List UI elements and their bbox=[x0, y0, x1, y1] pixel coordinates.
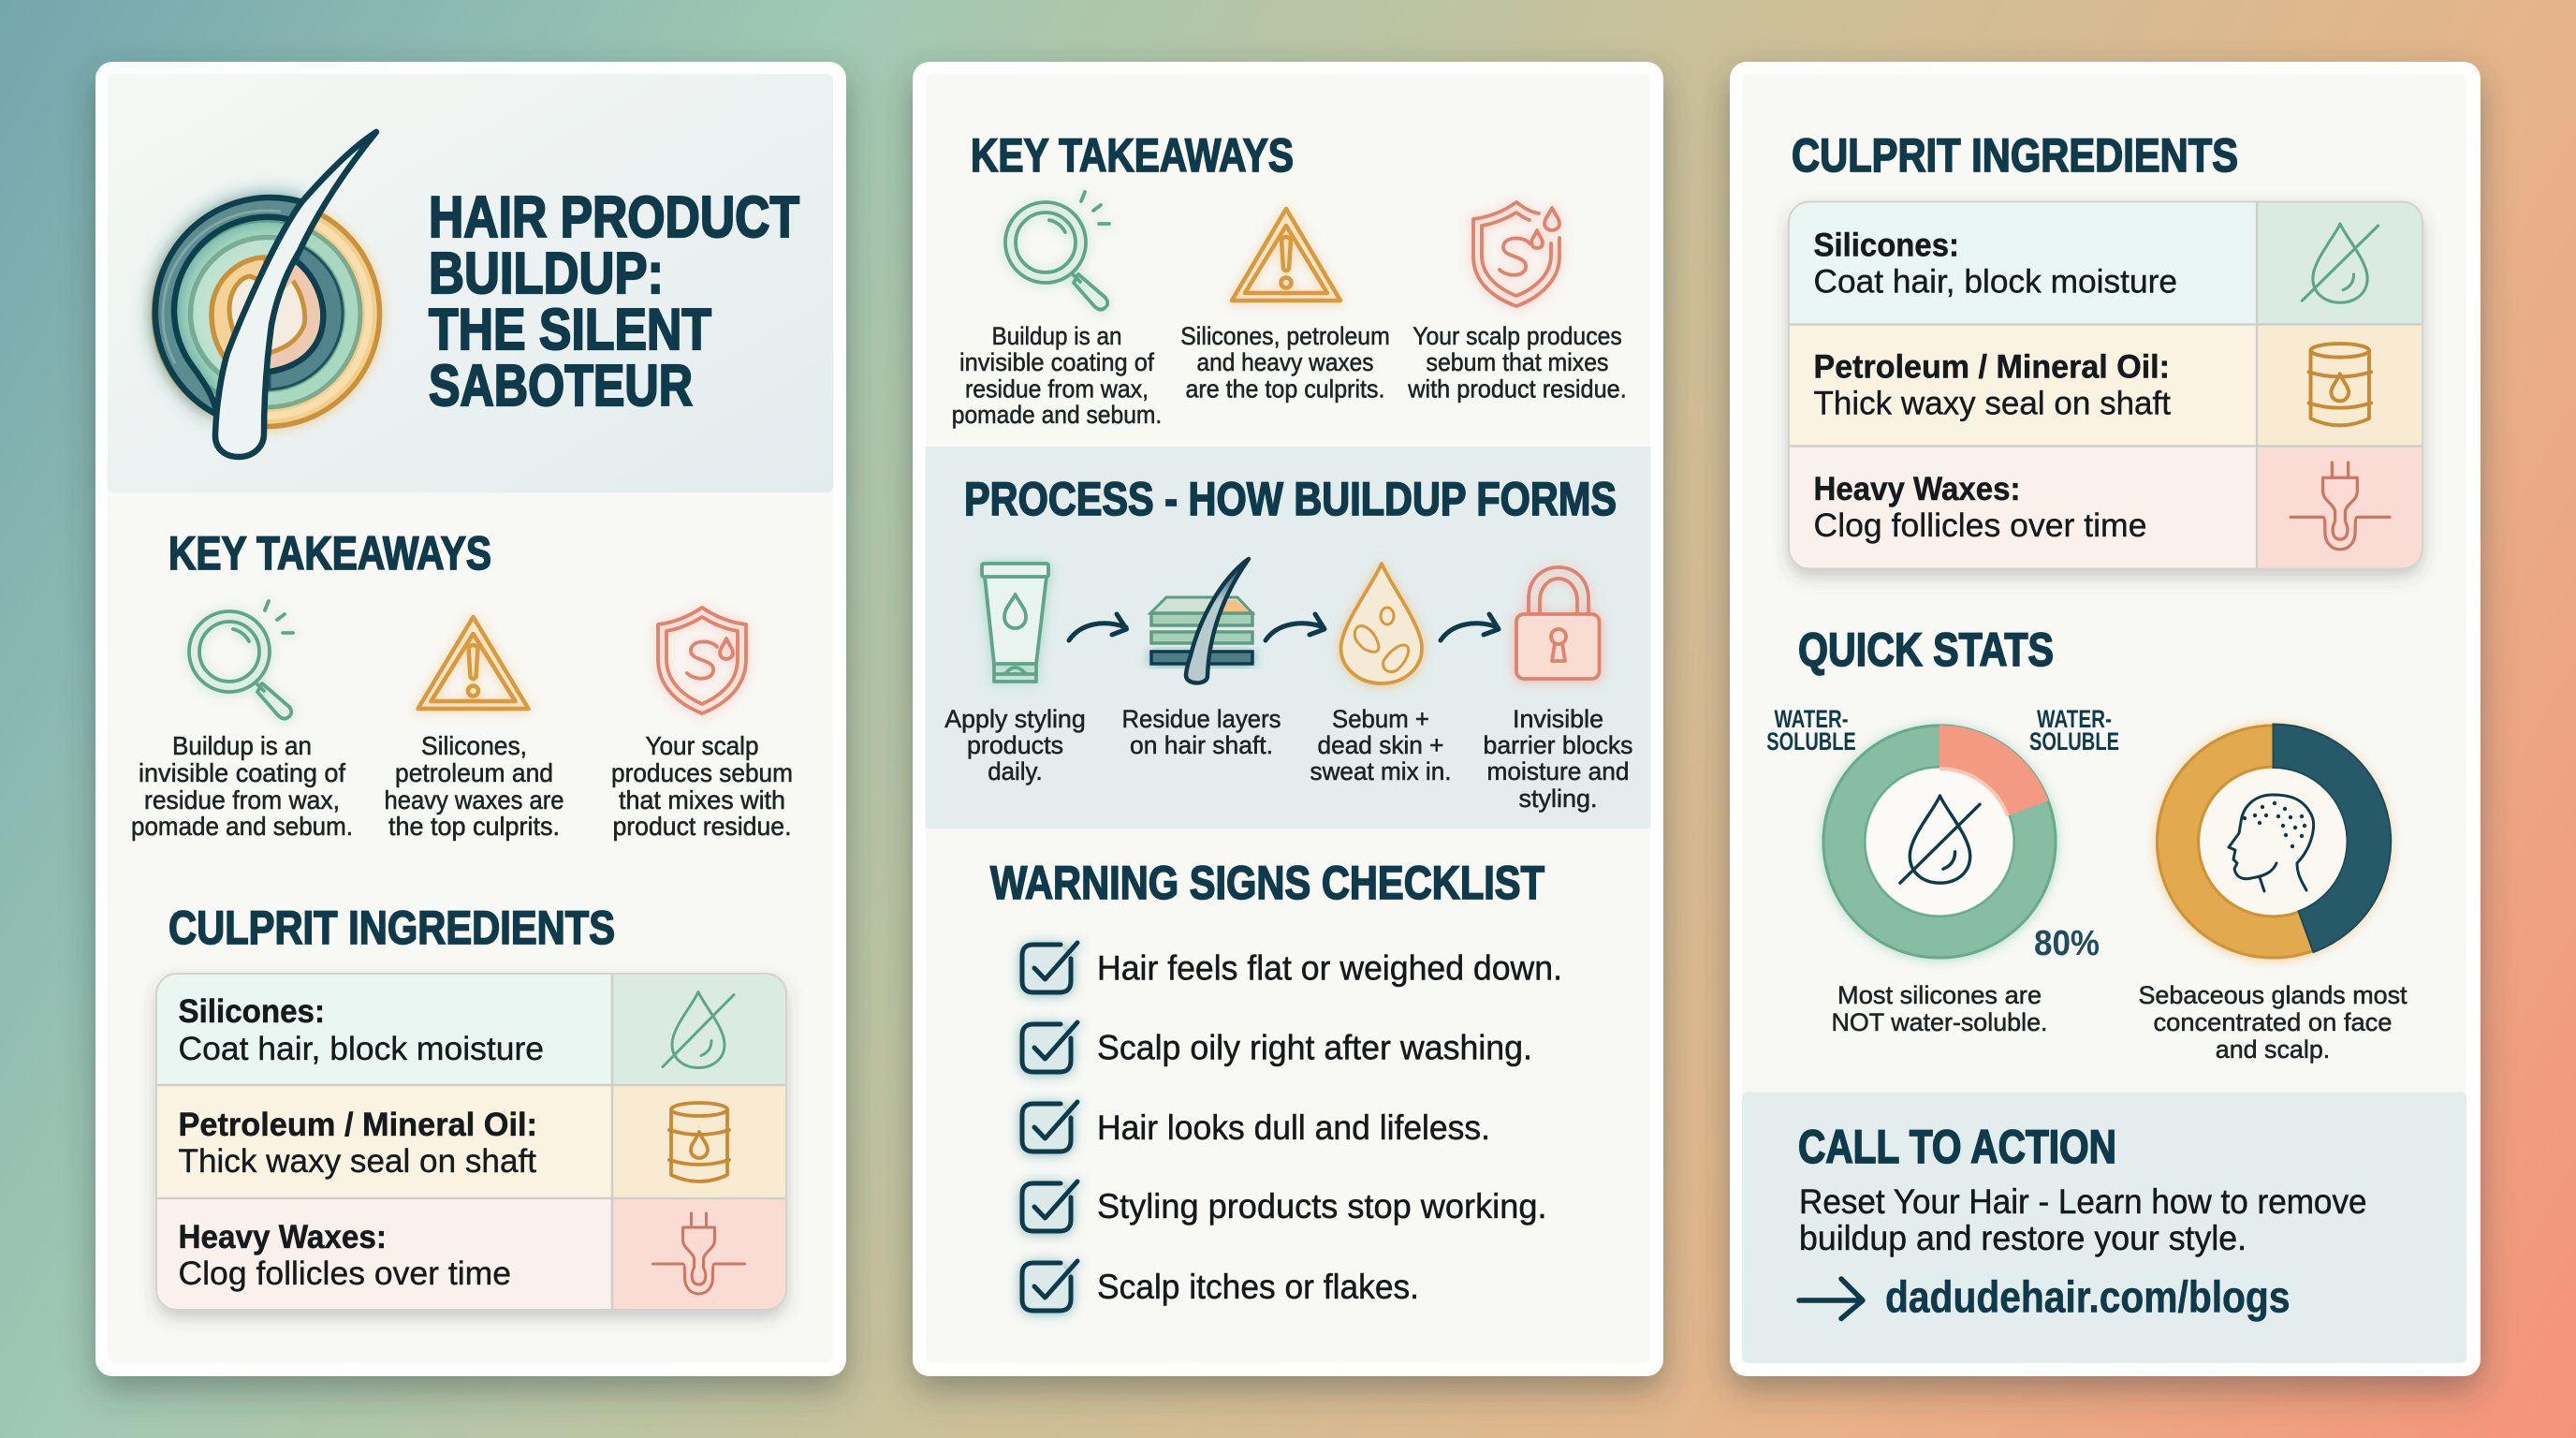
check item 3 bbox=[1022, 1102, 1490, 1152]
label: water-soluble right bbox=[2029, 705, 2119, 756]
row: petroleum: Petroleum / Mineral Oil: bbox=[178, 1107, 537, 1143]
text: step 3 bbox=[1310, 705, 1451, 785]
heading: warning signs: WARNING SIGNS CHECKLIST bbox=[990, 857, 1544, 909]
text: call to action body: buildup and restore your style. bbox=[1799, 1219, 2247, 1257]
caption: sebaceous stat: and scalp. bbox=[2216, 1035, 2330, 1064]
title: THE SILENT bbox=[429, 298, 711, 362]
text: takeaway 2: Silicones, bbox=[421, 731, 527, 760]
caption: silicones stat: Most silicones are bbox=[1837, 981, 2042, 1009]
text: takeaway 3 bbox=[611, 731, 793, 841]
stat: 80 percent: 80% bbox=[2034, 924, 2100, 963]
heading: culprit ingredients: CULPRIT INGREDIENTS bbox=[168, 902, 615, 954]
row: petroleum: Thick waxy seal on shaft bbox=[178, 1143, 536, 1180]
row: heavy waxes bbox=[1814, 471, 2147, 544]
heading: call to action: CALL TO ACTION bbox=[1798, 1121, 2116, 1173]
text: step 4 bbox=[1483, 705, 1632, 813]
heading: quick stats: QUICK STATS bbox=[1798, 624, 2054, 676]
row: heavy waxes bbox=[178, 1219, 511, 1292]
text: takeaway 2 bbox=[1180, 322, 1390, 403]
label: water-soluble left: SOLUBLE bbox=[1766, 727, 1856, 756]
icon: warning triangle bbox=[1232, 209, 1340, 301]
label: water-soluble right: WATER- bbox=[2037, 705, 2112, 733]
text: takeaway 3: that mixes with bbox=[619, 785, 785, 814]
icon: crossed drop bbox=[1900, 796, 1980, 883]
text: step 1: Apply styling bbox=[944, 705, 1086, 733]
text: takeaway 3: with product residue. bbox=[1407, 374, 1627, 403]
text: takeaway 1: pomade and sebum. bbox=[952, 401, 1162, 429]
row: silicones: Coat hair, block moisture bbox=[178, 1031, 544, 1067]
icon: shield with sebum drops bbox=[1473, 202, 1559, 306]
icon: padlock bbox=[1516, 567, 1599, 679]
text: takeaway 3: product residue. bbox=[612, 812, 792, 841]
text: takeaway 2: are the top culprits. bbox=[1185, 374, 1385, 403]
text: takeaway 1 bbox=[952, 322, 1162, 429]
text: takeaway 2: and heavy waxes bbox=[1196, 348, 1374, 376]
icon: warning triangle bbox=[417, 617, 528, 709]
icon: head with sebaceous dots bbox=[2229, 795, 2314, 891]
heading: key takeaways: KEY TAKEAWAYS bbox=[168, 527, 491, 580]
check item 2: Scalp oily right after washing. bbox=[1097, 1028, 1532, 1067]
heading: culprit ingredients: CULPRIT INGREDIENTS bbox=[1792, 129, 2238, 182]
row: heavy waxes: Clog follicles over time bbox=[1814, 507, 2147, 544]
text: step 2: on hair shaft. bbox=[1130, 731, 1273, 759]
table: culprit ingredients bbox=[1789, 202, 2422, 569]
arrow: step 2 to 3 bbox=[1266, 614, 1325, 640]
text: takeaway 3: Your scalp produces bbox=[1412, 322, 1622, 350]
caption: silicones stat bbox=[1831, 981, 2048, 1036]
text: step 4: moisture and bbox=[1486, 757, 1629, 785]
title: BUILDUP: bbox=[429, 242, 664, 306]
caption: sebaceous stat: Sebaceous glands most bbox=[2138, 981, 2408, 1009]
text: step 2: Residue layers bbox=[1121, 705, 1281, 733]
row: petroleum: Thick waxy seal on shaft bbox=[1814, 386, 2171, 421]
row: petroleum bbox=[178, 1107, 537, 1180]
caption: sebaceous stat: concentrated on face bbox=[2153, 1008, 2393, 1036]
table: culprit ingredients bbox=[156, 974, 786, 1310]
row: heavy waxes: Heavy Waxes: bbox=[178, 1219, 387, 1255]
icon: shield with sebum bbox=[658, 608, 746, 713]
caption: silicones stat: NOT water-soluble. bbox=[1831, 1008, 2048, 1036]
panel: left card bbox=[95, 62, 846, 1376]
text: takeaway 2 bbox=[384, 731, 564, 841]
row: silicones: Silicones: bbox=[178, 993, 325, 1030]
title bbox=[429, 185, 799, 418]
icon: plug in follicle bbox=[653, 1213, 745, 1294]
text: takeaway 2: the top culprits. bbox=[388, 812, 560, 841]
icon: sebum drop bbox=[1340, 564, 1422, 683]
check item 5: Scalp itches or flakes. bbox=[1097, 1268, 1419, 1306]
text: takeaway 1: pomade and sebum. bbox=[131, 812, 353, 841]
chart: sebaceous donut bbox=[2157, 724, 2391, 958]
checklist bbox=[1022, 943, 1562, 1311]
text: step 3: sweat mix in. bbox=[1310, 757, 1451, 785]
row: silicones bbox=[178, 993, 544, 1067]
check item 1 bbox=[1022, 943, 1562, 992]
row: petroleum bbox=[1814, 348, 2171, 421]
arrow: link bbox=[1799, 1279, 1863, 1318]
text: step 4: styling. bbox=[1518, 785, 1597, 813]
text: call to action body: Reset Your Hair - Learn how to remove bbox=[1799, 1182, 2366, 1221]
text: takeaway 1: Buildup is an bbox=[172, 731, 312, 760]
row: silicones: Coat hair, block moisture bbox=[1814, 264, 2177, 300]
panel: right card bbox=[1730, 62, 2481, 1376]
text: takeaway 3: produces sebum bbox=[611, 758, 793, 787]
text: takeaway 3: Your scalp bbox=[646, 731, 758, 760]
text: step 1 bbox=[944, 705, 1086, 785]
title: SABOTEUR bbox=[429, 354, 693, 418]
check item 3: Hair looks dull and lifeless. bbox=[1097, 1108, 1490, 1147]
check item 5 bbox=[1022, 1261, 1419, 1311]
text: takeaway 2: heavy waxes are bbox=[384, 785, 564, 814]
text: takeaway 1: residue from wax, bbox=[965, 374, 1149, 403]
row: petroleum: Petroleum / Mineral Oil: bbox=[1814, 348, 2170, 386]
arrow: step 3 to 4 bbox=[1441, 614, 1499, 640]
heading: process: PROCESS - HOW BUILDUP FORMS bbox=[964, 473, 1617, 525]
icon: oil barrel bbox=[2308, 344, 2371, 425]
arrow: step 1 to 2 bbox=[1069, 614, 1127, 640]
text: step 1: products bbox=[967, 731, 1063, 759]
panel: call to action bbox=[1742, 1092, 2466, 1363]
text: takeaway 1: Buildup is an bbox=[992, 322, 1121, 350]
icon: crossed drop bbox=[2302, 224, 2378, 302]
icon: oil barrel bbox=[669, 1103, 729, 1181]
text: takeaway 1: residue from wax, bbox=[144, 785, 340, 814]
text: takeaway 2: Silicones, petroleum bbox=[1180, 322, 1390, 350]
label: water-soluble right: SOLUBLE bbox=[2029, 727, 2119, 756]
row: heavy waxes: Clog follicles over time bbox=[178, 1255, 511, 1292]
icon: product tube bbox=[982, 564, 1048, 682]
chart: silicones donut bbox=[1823, 725, 2056, 958]
icon: hair strand with buildup rings bbox=[154, 132, 380, 457]
text: step 4: Invisible bbox=[1513, 705, 1603, 733]
panel: middle card bbox=[913, 62, 1663, 1376]
text: takeaway 1 bbox=[131, 731, 353, 841]
text: takeaway 1: invisible coating of bbox=[139, 758, 345, 787]
text: step 3: dead skin + bbox=[1318, 731, 1443, 759]
row: heavy waxes: Heavy Waxes: bbox=[1814, 471, 2020, 507]
text: takeaway 1: invisible coating of bbox=[959, 348, 1154, 376]
icon: residue layers on hair bbox=[1150, 559, 1252, 683]
label: water-soluble left: WATER- bbox=[1775, 705, 1848, 733]
check item 4 bbox=[1022, 1181, 1546, 1231]
check item 4: Styling products stop working. bbox=[1097, 1187, 1546, 1225]
text: call to action body bbox=[1799, 1182, 2366, 1257]
label: water-soluble left bbox=[1766, 705, 1856, 756]
title: HAIR PRODUCT bbox=[429, 185, 799, 250]
text: step 4: barrier blocks bbox=[1483, 731, 1632, 759]
header band bbox=[108, 74, 833, 492]
icon: magnifier bbox=[1005, 192, 1109, 310]
row: silicones bbox=[1814, 227, 2177, 300]
icon: crossed drop bbox=[663, 992, 734, 1067]
text: takeaway 3: sebum that mixes bbox=[1427, 348, 1608, 376]
check item 2 bbox=[1022, 1022, 1532, 1072]
text: takeaway 2: petroleum and bbox=[395, 758, 553, 787]
text: takeaway 3 bbox=[1407, 322, 1627, 403]
check item 1: Hair feels flat or weighed down. bbox=[1097, 949, 1562, 987]
icon: magnifier bbox=[189, 601, 293, 719]
caption: sebaceous stat bbox=[2138, 981, 2408, 1064]
row: silicones: Silicones: bbox=[1814, 227, 1959, 264]
link text: dadudehair.com/blogs bbox=[1885, 1271, 2290, 1322]
process band bbox=[926, 447, 1650, 829]
text: step 1: daily. bbox=[988, 757, 1043, 785]
text: step 2 bbox=[1121, 705, 1281, 759]
text: step 3: Sebum + bbox=[1332, 705, 1429, 733]
icon: plug in follicle bbox=[2291, 462, 2390, 550]
heading: key takeaways: KEY TAKEAWAYS bbox=[971, 129, 1294, 182]
